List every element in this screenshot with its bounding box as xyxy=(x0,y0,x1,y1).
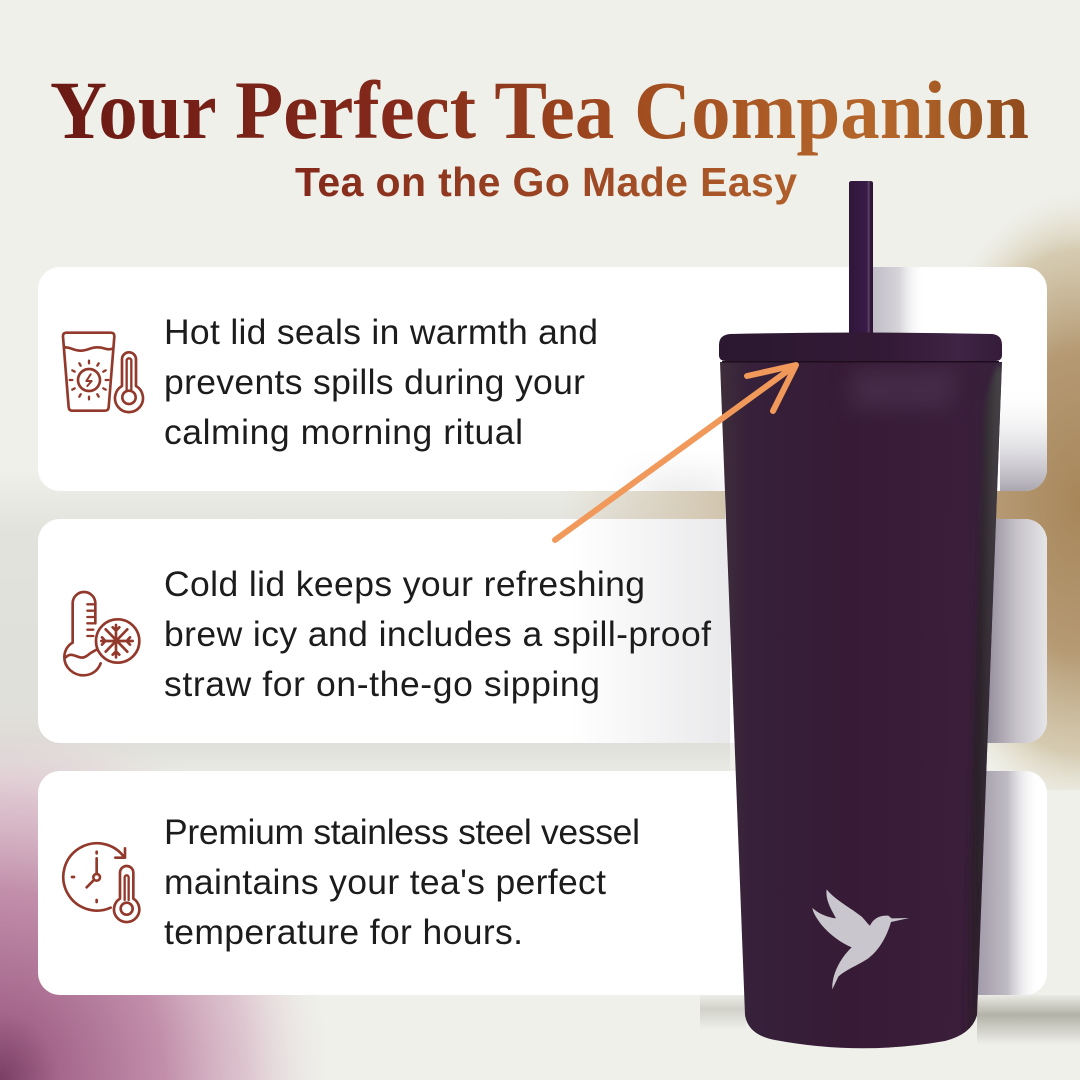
text: vessel description xyxy=(164,812,640,952)
text: cold lid description xyxy=(164,564,711,704)
title: Your Perfect Tea Companion xyxy=(50,64,1029,156)
arrow pointing to lid xyxy=(555,365,796,540)
icon: clock with thermometer xyxy=(63,843,139,922)
panel: hot lid xyxy=(38,267,1047,510)
tumbler body xyxy=(715,360,1007,1060)
text: vessel description: Premium stainless steel vessel xyxy=(164,812,640,852)
icon: hot cup with thermometer xyxy=(63,333,143,412)
tumbler shadow on hot lid panel xyxy=(640,267,1047,510)
straw xyxy=(849,181,873,334)
icon: cold thermometer with snowflake xyxy=(64,592,139,675)
text: hot lid description xyxy=(164,312,598,452)
tumbler shadow on vessel panel xyxy=(978,771,1028,995)
tumbler xyxy=(715,181,1007,1060)
tumbler lid xyxy=(719,332,1002,361)
text: hot lid description: prevents spills during your xyxy=(164,362,585,402)
panel: stainless vessel xyxy=(38,771,1047,995)
panel: cold lid xyxy=(38,519,1047,743)
text: cold lid description: brew icy and includes a spill-proof xyxy=(164,614,711,654)
hummingbird logo xyxy=(812,889,909,989)
floor shadow xyxy=(700,995,1080,1045)
text: vessel description: maintains your tea's perfect xyxy=(164,862,606,902)
tumbler shadow on cold lid panel xyxy=(628,519,1047,743)
text: cold lid description: straw for on-the-go sipping xyxy=(164,664,600,704)
text: cold lid description: Cold lid keeps your refreshing xyxy=(164,564,645,604)
text: hot lid description: calming morning ritual xyxy=(164,412,523,452)
text: hot lid description: Hot lid seals in warmth and xyxy=(164,312,598,352)
subtitle: Tea on the Go Made Easy xyxy=(295,159,797,205)
text: vessel description: temperature for hours. xyxy=(164,912,523,952)
